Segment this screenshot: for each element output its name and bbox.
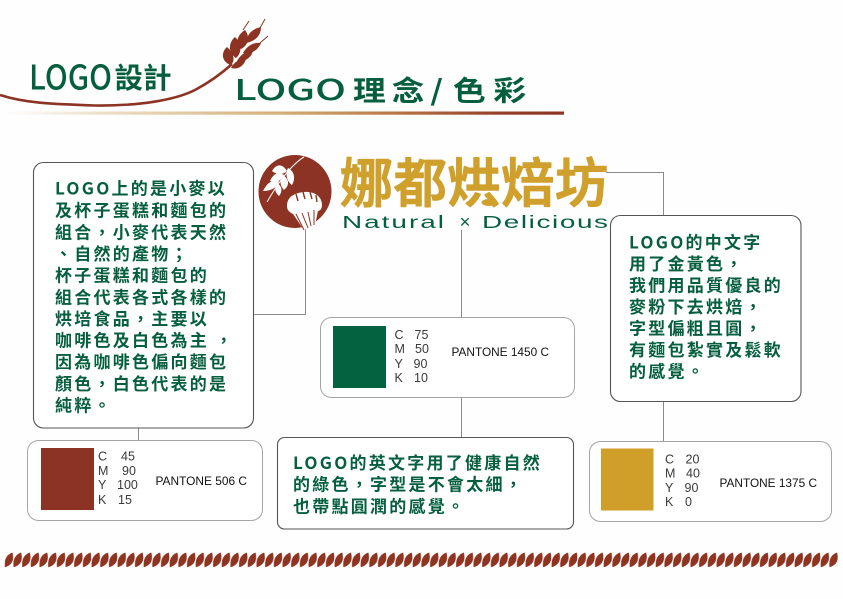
left explanation text: 組合，小麥代表天然: [55, 218, 228, 244]
bottom explanation text: 也帶點圓潤的感覺。: [293, 492, 466, 518]
right explanation text: 我們用品質優良的: [629, 272, 783, 296]
left explanation text: 杯子蛋糕和麵包的: [55, 262, 209, 286]
logo english tagline: Delicious: [482, 212, 608, 232]
panel: brown colour card: [28, 440, 262, 520]
green pantone label: PANTONE 1450 C: [452, 345, 549, 359]
gradient rule under header: [0, 112, 564, 115]
gold CMYK values: M: [665, 466, 675, 480]
brown CMYK values: Y: [98, 478, 107, 492]
bottom explanation text: 的綠色，字型是不會太細，: [293, 470, 524, 496]
left explanation text: [55, 174, 234, 416]
brown CMYK values: [98, 450, 138, 507]
panel: green colour card: [320, 318, 574, 398]
bottom explanation text: LOGO的英文字用了健康自然: [293, 449, 542, 474]
gold swatch: [601, 448, 654, 510]
panel: left explanation box: [34, 162, 254, 428]
left explanation text: 及杯子蛋糕和麵包的: [55, 196, 228, 222]
green CMYK values: 50: [415, 342, 429, 356]
brown CMYK values: C: [98, 450, 107, 464]
heading: LOGO設計: 設計: [114, 56, 172, 97]
brown CMYK values: 15: [118, 493, 132, 507]
curved wheat stalk swoosh: [0, 64, 232, 106]
green CMYK values: M: [394, 342, 405, 356]
heading: LOGO理念/色彩: 理念/色彩: [353, 68, 526, 109]
icon: white wheat in emblem: [263, 157, 304, 202]
footer wheat seed border: [5, 552, 838, 568]
gold CMYK values: 0: [685, 495, 692, 509]
brown pantone label: PANTONE 506 C: [156, 474, 247, 488]
gold CMYK values: C: [665, 452, 674, 466]
icon: white muffin in emblem: [287, 192, 322, 230]
icon: wheat ear: [223, 19, 268, 69]
logo chinese wordmark: 娜都烘焙坊: [340, 142, 608, 218]
brown CMYK values: 90: [122, 464, 136, 478]
left explanation text: 純粹。: [55, 392, 113, 416]
right explanation text: 用了金黃色，: [629, 250, 744, 275]
heading: LOGO理念/色彩: LOGO: [234, 68, 346, 109]
logo english tagline: ×: [460, 212, 470, 232]
right explanation text: [629, 228, 783, 382]
heading: LOGO設計: [29, 50, 172, 100]
right explanation text: 字型偏粗且圓，: [629, 314, 764, 340]
left explanation text: 、自然的產物；: [55, 240, 190, 265]
gold CMYK values: 40: [686, 466, 700, 480]
green swatch: [333, 326, 386, 388]
bottom explanation text: [293, 449, 542, 518]
brown CMYK values: M: [98, 464, 108, 478]
gold CMYK values: K: [665, 495, 674, 509]
green CMYK values: 75: [414, 328, 428, 342]
gold CMYK values: [665, 452, 700, 509]
right explanation text: 麥粉下去烘焙，: [629, 293, 764, 318]
panel: bottom explanation box: [278, 438, 574, 529]
panel: right explanation box: [610, 216, 801, 402]
gold CMYK values: 20: [686, 452, 699, 466]
green CMYK values: [394, 328, 429, 385]
left explanation text: 組合代表各式各樣的: [55, 284, 228, 308]
brown CMYK values: 45: [121, 450, 135, 464]
logo emblem: [258, 155, 332, 230]
green CMYK values: K: [394, 371, 404, 385]
connector lines: [138, 172, 664, 441]
brown CMYK values: K: [98, 493, 107, 507]
brown swatch: [41, 448, 94, 510]
right explanation text: LOGO的中文字: [629, 228, 763, 254]
gold CMYK values: Y: [665, 481, 674, 495]
green CMYK values: Y: [394, 357, 404, 371]
left explanation text: LOGO上的是小麥以: [55, 174, 227, 200]
left explanation text: 烘培食品，主要以: [55, 305, 209, 330]
gold pantone label: PANTONE 1375 C: [720, 476, 817, 490]
logo english tagline: [342, 212, 608, 232]
panel: gold colour card: [590, 442, 832, 522]
green CMYK values: 10: [414, 371, 428, 385]
green CMYK values: C: [394, 328, 404, 342]
left explanation text: 顏色，白色代表的是: [55, 370, 228, 395]
brown CMYK values: 100: [117, 478, 138, 492]
gold CMYK values: 90: [684, 481, 698, 495]
right explanation text: 有麵包紮實及鬆軟: [629, 336, 783, 361]
heading: LOGO理念/色彩: [234, 68, 526, 109]
right explanation text: 的感覺。: [629, 358, 706, 382]
green CMYK values: 90: [414, 357, 427, 371]
left explanation text: 咖啡色及白色為主 ，: [55, 326, 234, 352]
heading: LOGO設計: LOGO: [29, 50, 112, 100]
left explanation text: 因為咖啡色偏向麵包: [55, 348, 228, 373]
logo english tagline: Natural: [342, 212, 444, 232]
